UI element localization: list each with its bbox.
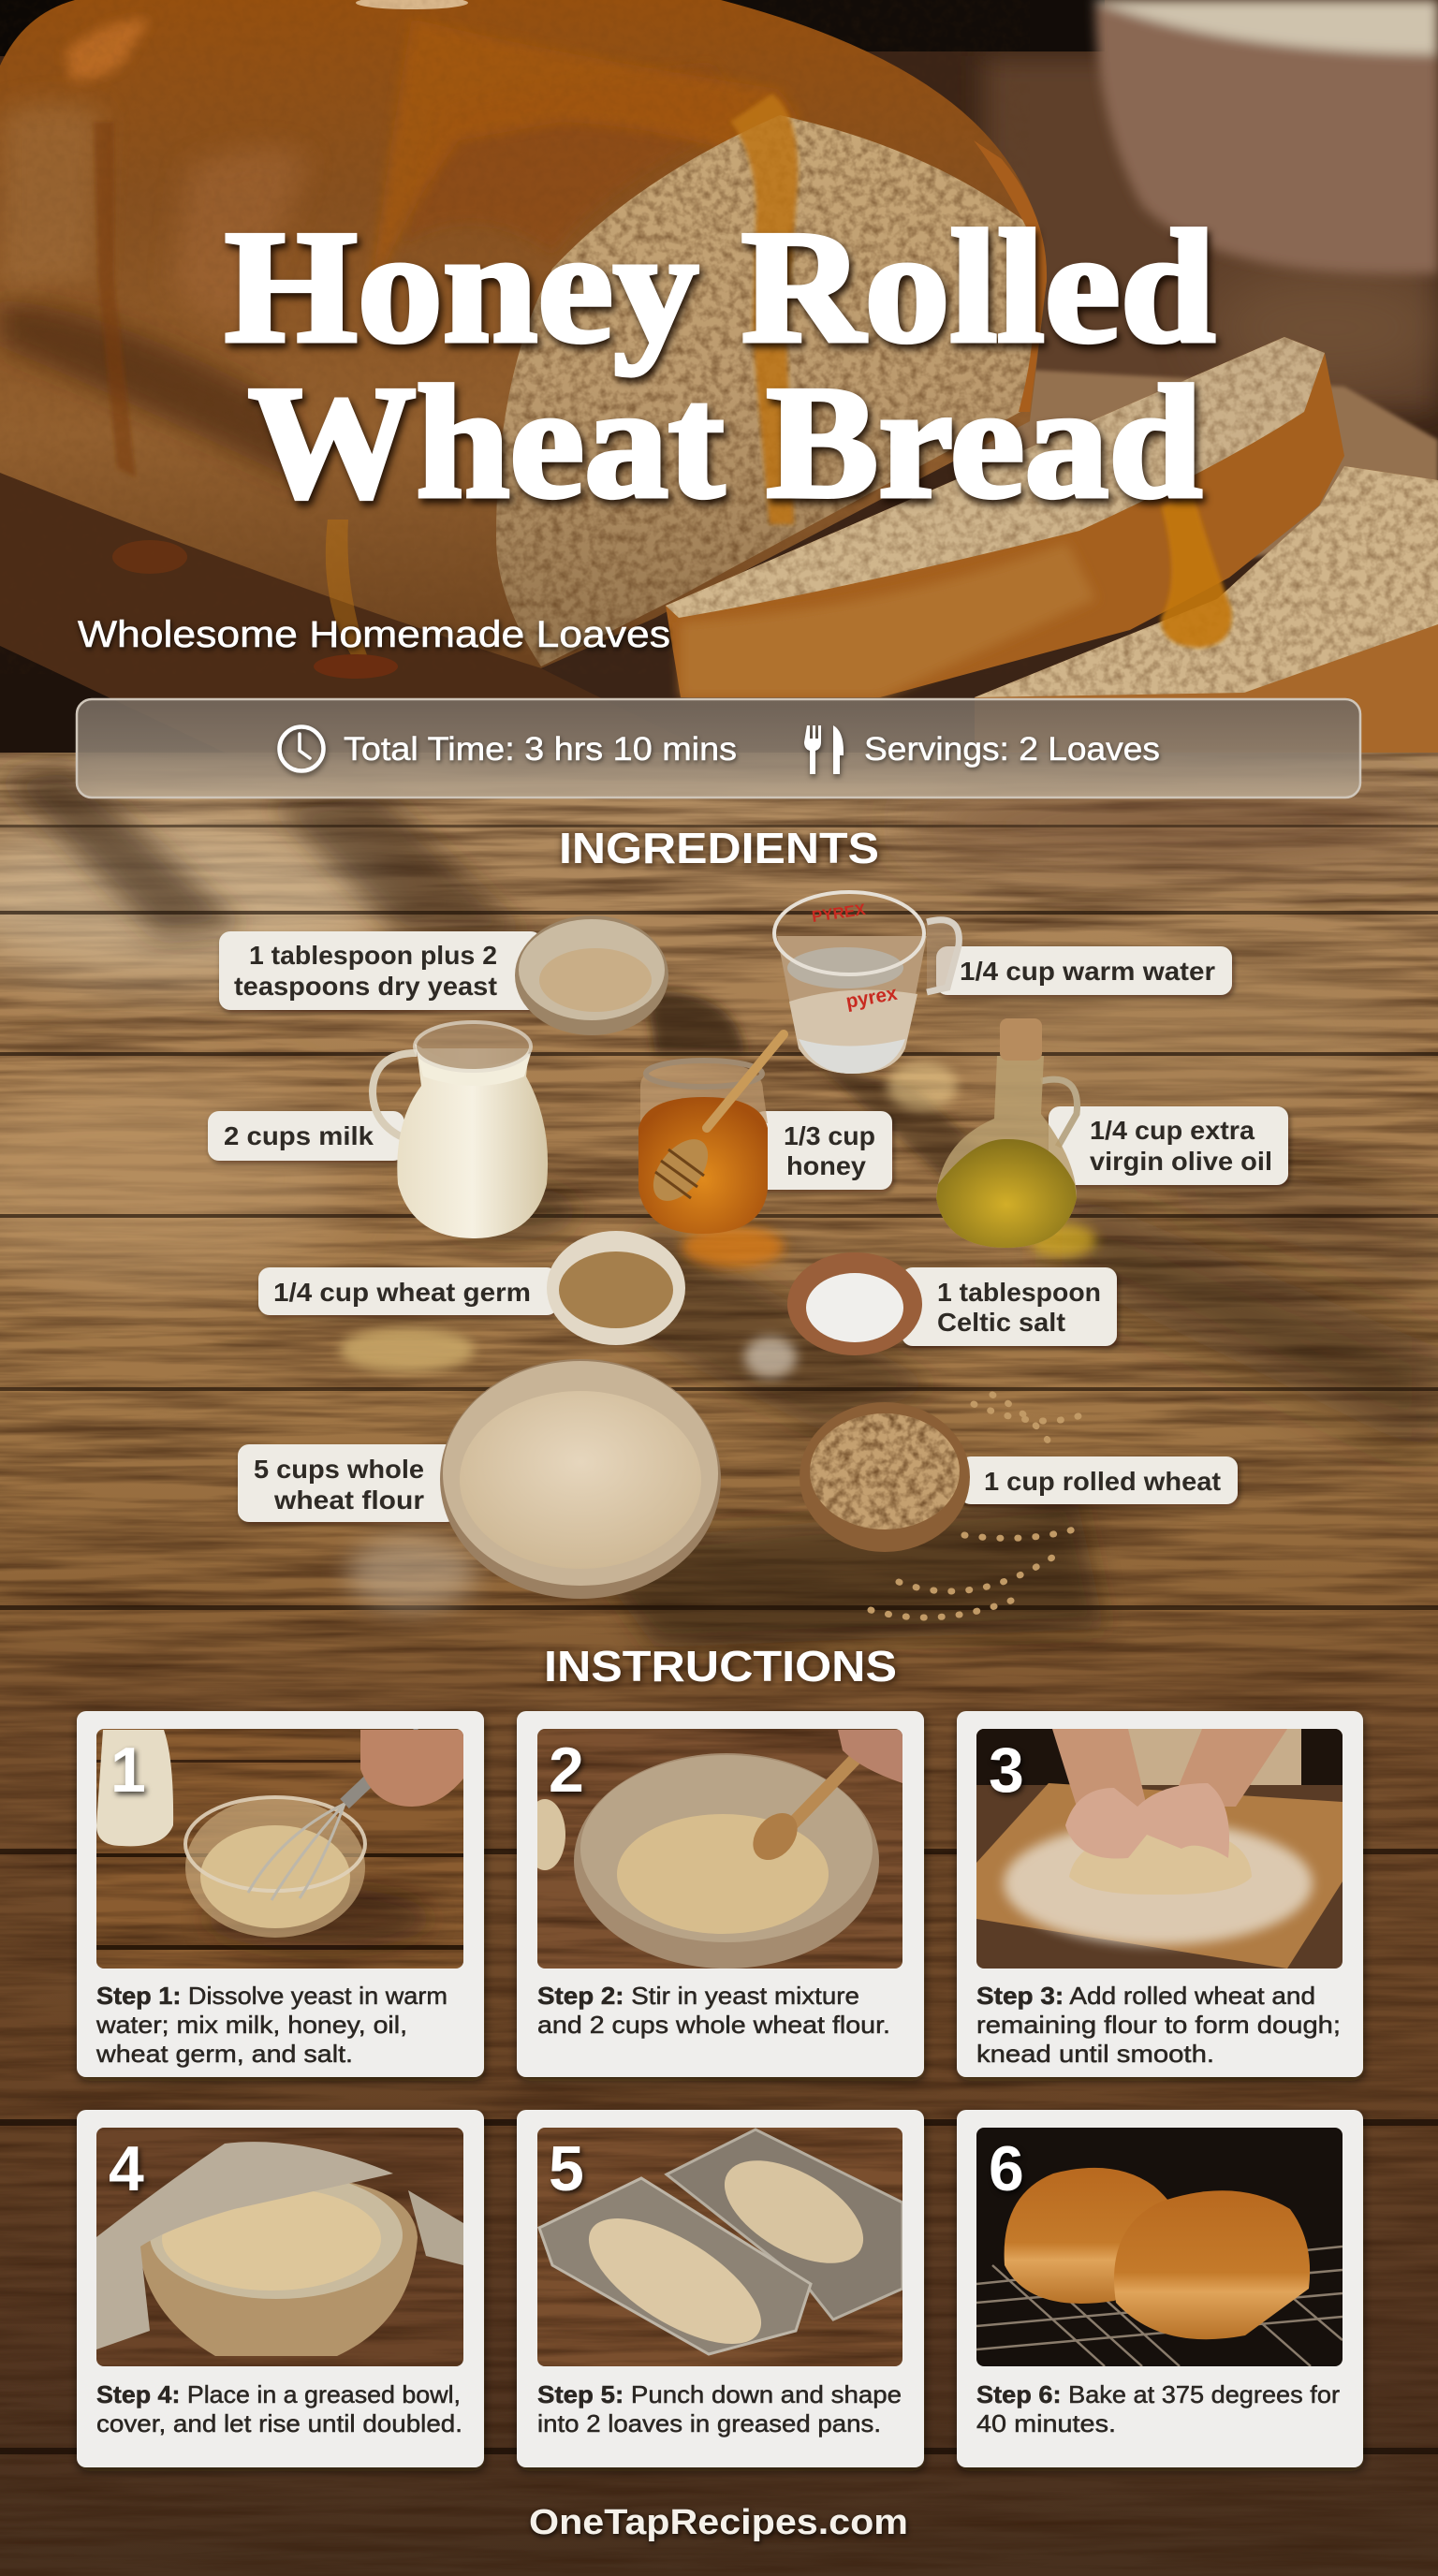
step 6 text [976, 2380, 1340, 2437]
icon: yeast bowl [515, 915, 668, 1035]
label: salt: 1 tablespoon [937, 1278, 1101, 1307]
step 6 text: 40 minutes. [976, 2409, 1116, 2437]
label: whole wheat flour: 5 cups whole [254, 1455, 424, 1484]
step 2 text: and 2 cups whole wheat flour. [537, 2011, 890, 2039]
step number 3: 3 [989, 1734, 1024, 1806]
title [225, 198, 1215, 532]
step 6 photo: baking in oven [976, 2128, 1343, 2366]
info banner [77, 699, 1360, 798]
back slice of bread [975, 466, 1438, 753]
step 4 photo: dough rising [96, 2128, 463, 2366]
icon: clock [279, 726, 324, 771]
label: whole wheat flour [238, 1444, 458, 1522]
wheat germ spill [340, 1327, 475, 1372]
background bowl [1092, 0, 1438, 274]
label: salt: Celtic salt [937, 1308, 1065, 1337]
heading: instructions: INSTRUCTIONS [544, 1642, 897, 1690]
icon: milk jug [373, 1022, 576, 1240]
label: honey: honey [786, 1151, 866, 1180]
step 1 text: wheat germ, and salt. [95, 2040, 353, 2068]
label: dry yeast: 1 tablespoon plus 2 [249, 941, 497, 970]
label: rolled wheat [960, 1456, 1238, 1504]
loaf cut face [496, 115, 1043, 666]
step card 4 [77, 2110, 484, 2467]
ingredients panel [208, 892, 1288, 1617]
icon: rolled wheat bowl [800, 1402, 970, 1552]
label: wheat germ [258, 1267, 558, 1315]
step 5 text: Step 5: Punch down and shape [537, 2380, 902, 2408]
icon: flour bowl [440, 1359, 721, 1599]
step 3 text [976, 1982, 1341, 2068]
heading: ingredients: INGREDIENTS [559, 824, 879, 872]
step 3 photo: kneading [976, 1729, 1343, 1969]
step 5 text: into 2 loaves in greased pans. [537, 2409, 881, 2437]
label: warm water [936, 946, 1232, 995]
label: honey [754, 1111, 892, 1190]
step number 4: 4 [109, 2133, 144, 2204]
total time text: Total Time: 3 hrs 10 mins [344, 731, 737, 768]
icon: measuring cup: PYREX [811, 900, 867, 926]
label: dry yeast [219, 931, 542, 1010]
icon: olive oil bottle [936, 1018, 1078, 1248]
step 2 text: Step 2: Stir in yeast mixture [537, 1982, 859, 2010]
step number 6: 6 [989, 2133, 1024, 2204]
step 6 text: Step 6: Bake at 375 degrees for [976, 2380, 1340, 2408]
label: whole wheat flour: wheat flour [273, 1486, 424, 1515]
label: olive oil: 1/4 cup extra [1090, 1116, 1255, 1145]
step card 5 [517, 2110, 924, 2467]
step card 6 [957, 2110, 1363, 2467]
honey drip on slice [1161, 496, 1232, 648]
step card 3 [957, 1711, 1363, 2077]
title: Honey Rolled [225, 198, 1215, 376]
icon: wheat germ bowl [547, 1231, 685, 1345]
footer website: OneTapRecipes.com [529, 2503, 908, 2542]
hero photo: bread loaf on a board [0, 0, 1438, 753]
step 1 text [95, 1982, 448, 2068]
step card 1 [77, 1711, 484, 2077]
icon: measuring cup: pyrex [844, 983, 899, 1013]
icon: salt bowl [787, 1252, 922, 1355]
step 1 text: Step 1: Dissolve yeast in warm [96, 1982, 448, 2010]
step 5 photo: loaves in pans [537, 2128, 902, 2368]
step 1 photo: whisking [96, 1729, 463, 1969]
servings text: Servings: 2 Loaves [864, 731, 1160, 768]
label: milk [208, 1111, 404, 1161]
step 4 text: cover, and let rise until doubled. [96, 2409, 462, 2437]
label: salt [902, 1267, 1117, 1346]
loaf crust [0, 0, 1047, 668]
step 4 text: Step 4: Place in a greased bowl, [96, 2380, 461, 2408]
step 2 photo: stirring dough [524, 1729, 902, 1969]
step 5 text [537, 2380, 902, 2437]
label: milk: 2 cups milk [224, 1121, 374, 1150]
step number 5: 5 [549, 2133, 584, 2204]
honey drizzle [112, 94, 798, 679]
title: Wheat Bread [248, 354, 1202, 532]
step number 2: 2 [549, 1734, 584, 1806]
step 4 text [96, 2380, 462, 2437]
icon: honey jar with dipper [638, 1034, 784, 1234]
step number 1: 1 [110, 1734, 146, 1806]
label: warm water: 1/4 cup warm water [960, 957, 1215, 986]
step 1 text: water; mix milk, honey, oil, [95, 2011, 407, 2039]
front slice of bread [655, 328, 1344, 697]
wood table background [0, 753, 1438, 2576]
label: dry yeast: teaspoons dry yeast [234, 972, 497, 1001]
step 2 text [537, 1982, 890, 2039]
step card 2 [517, 1711, 924, 2077]
subtitle: Wholesome Homemade Loaves [78, 614, 670, 655]
step 3 text: remaining flour to form dough; [976, 2011, 1341, 2039]
label: wheat germ: 1/4 cup wheat germ [273, 1278, 531, 1307]
icon: measuring cup [774, 892, 959, 1074]
label: rolled wheat: 1 cup rolled wheat [984, 1467, 1221, 1496]
step 3 text: Step 3: Add rolled wheat and [976, 1982, 1315, 2010]
label: olive oil: virgin olive oil [1090, 1147, 1272, 1176]
step 3 text: knead until smooth. [976, 2040, 1214, 2068]
scattered oats [871, 1395, 1086, 1617]
label: honey: 1/3 cup [784, 1121, 875, 1150]
flour dust [744, 1337, 797, 1378]
icon: fork and knife [804, 725, 844, 774]
label: olive oil [1049, 1106, 1288, 1185]
